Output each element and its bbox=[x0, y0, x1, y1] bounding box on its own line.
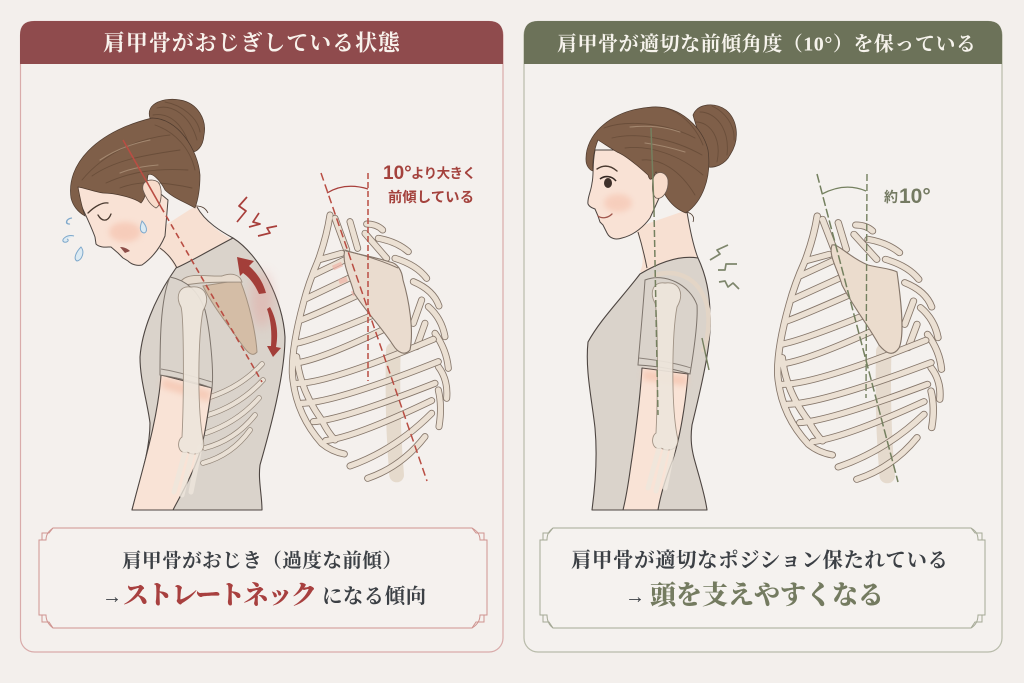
tilt dashed line bbox=[321, 173, 427, 481]
lips bbox=[120, 247, 130, 253]
facial features bbox=[88, 203, 111, 220]
label: about ten degrees: 10° bbox=[899, 185, 931, 208]
label: over ten degrees: 10° bbox=[383, 163, 412, 184]
label: over ten degrees: より大きく bbox=[411, 165, 476, 181]
green spark marks bbox=[710, 245, 739, 289]
illustration: rib cage with excessive tilt bbox=[292, 173, 448, 481]
bun bbox=[149, 99, 205, 152]
scapula bbox=[344, 250, 411, 353]
sleeve shadow bbox=[162, 378, 211, 402]
label: over ten degrees: 前傾している bbox=[388, 188, 474, 206]
angle arc bbox=[822, 187, 866, 194]
bun bbox=[693, 105, 736, 167]
scapula bbox=[181, 274, 257, 354]
posture lines bbox=[651, 128, 709, 415]
arm bone bbox=[648, 283, 681, 491]
sleeve bbox=[638, 278, 697, 374]
heading band left bbox=[20, 21, 503, 64]
hair strands bbox=[82, 125, 195, 188]
shirt bbox=[132, 238, 285, 510]
vertical dashed line bbox=[367, 173, 369, 381]
sweat drops bbox=[63, 218, 146, 261]
rib cage bbox=[778, 216, 942, 479]
tilt dashed line bbox=[817, 174, 898, 482]
illustration: woman with upright posture bbox=[586, 105, 739, 510]
illustration: rib cage at proper tilt bbox=[778, 174, 942, 482]
callout text left bbox=[102, 549, 426, 610]
callout frame left bbox=[39, 528, 487, 628]
label: about ten degrees: 約 bbox=[884, 189, 898, 205]
label: over ten degrees bbox=[383, 163, 476, 206]
sleeve bbox=[160, 277, 213, 388]
red strain arrows bbox=[237, 257, 281, 357]
heading band right bbox=[524, 21, 1002, 64]
face bbox=[588, 150, 665, 239]
callout text left: 肩甲骨がおじき（過度な前傾） bbox=[122, 549, 402, 572]
callout text left: → bbox=[102, 586, 122, 608]
panel: shoulder blade at proper angle bbox=[524, 21, 1002, 652]
neck outline bbox=[160, 207, 233, 268]
illustration: woman with stooped posture bbox=[63, 99, 285, 510]
angle arc bbox=[327, 186, 368, 193]
shirt bbox=[587, 257, 710, 510]
heading left: 肩甲骨がおじぎしている状態 bbox=[103, 30, 402, 56]
hair wisp bbox=[686, 212, 694, 222]
hair strands bbox=[604, 108, 703, 195]
arm bbox=[132, 375, 212, 510]
red spark marks bbox=[237, 197, 277, 236]
panel body right bbox=[524, 22, 1002, 652]
cheek blush bbox=[109, 222, 141, 242]
eyelid bbox=[600, 177, 616, 181]
shoulder arc bbox=[655, 273, 709, 350]
vertical dashed line bbox=[866, 174, 867, 398]
ear bbox=[143, 180, 161, 208]
posture line solid and dashed bbox=[123, 140, 262, 382]
smile bbox=[598, 214, 612, 218]
back ribs bbox=[203, 364, 263, 463]
cheek blush bbox=[604, 194, 632, 212]
scapula bbox=[831, 245, 902, 353]
ear bbox=[652, 172, 668, 198]
arm bone bbox=[174, 287, 207, 495]
neck bbox=[635, 210, 698, 275]
panel body left bbox=[20, 22, 503, 652]
callout text right: → bbox=[625, 586, 645, 608]
panel: shoulder blade drooping bbox=[20, 21, 503, 652]
sleeve shadow bbox=[643, 370, 688, 386]
heading right: 肩甲骨が適切な前傾角度（10°）を保っている bbox=[557, 32, 976, 56]
facial features bbox=[597, 166, 617, 171]
callout text right: 頭を支えやすくなる bbox=[650, 580, 884, 610]
callout frame right bbox=[540, 528, 985, 628]
rib cage bbox=[292, 215, 448, 478]
rib pink strain bbox=[333, 264, 356, 294]
hair wisp bbox=[196, 206, 208, 213]
callout text right: 肩甲骨が適切なポジション保たれている bbox=[571, 548, 948, 572]
face bbox=[74, 180, 168, 265]
hair bbox=[586, 107, 709, 213]
hair bbox=[70, 118, 200, 216]
strain glow bbox=[251, 272, 273, 328]
label: about ten degrees bbox=[884, 185, 931, 208]
eye bbox=[604, 178, 612, 188]
callout text left: ストレートネック bbox=[123, 581, 317, 610]
arm bbox=[623, 368, 688, 510]
callout text left: になる傾向 bbox=[322, 585, 426, 608]
neck outline bbox=[638, 212, 698, 268]
callout text right bbox=[571, 548, 948, 610]
neck bbox=[150, 205, 233, 272]
